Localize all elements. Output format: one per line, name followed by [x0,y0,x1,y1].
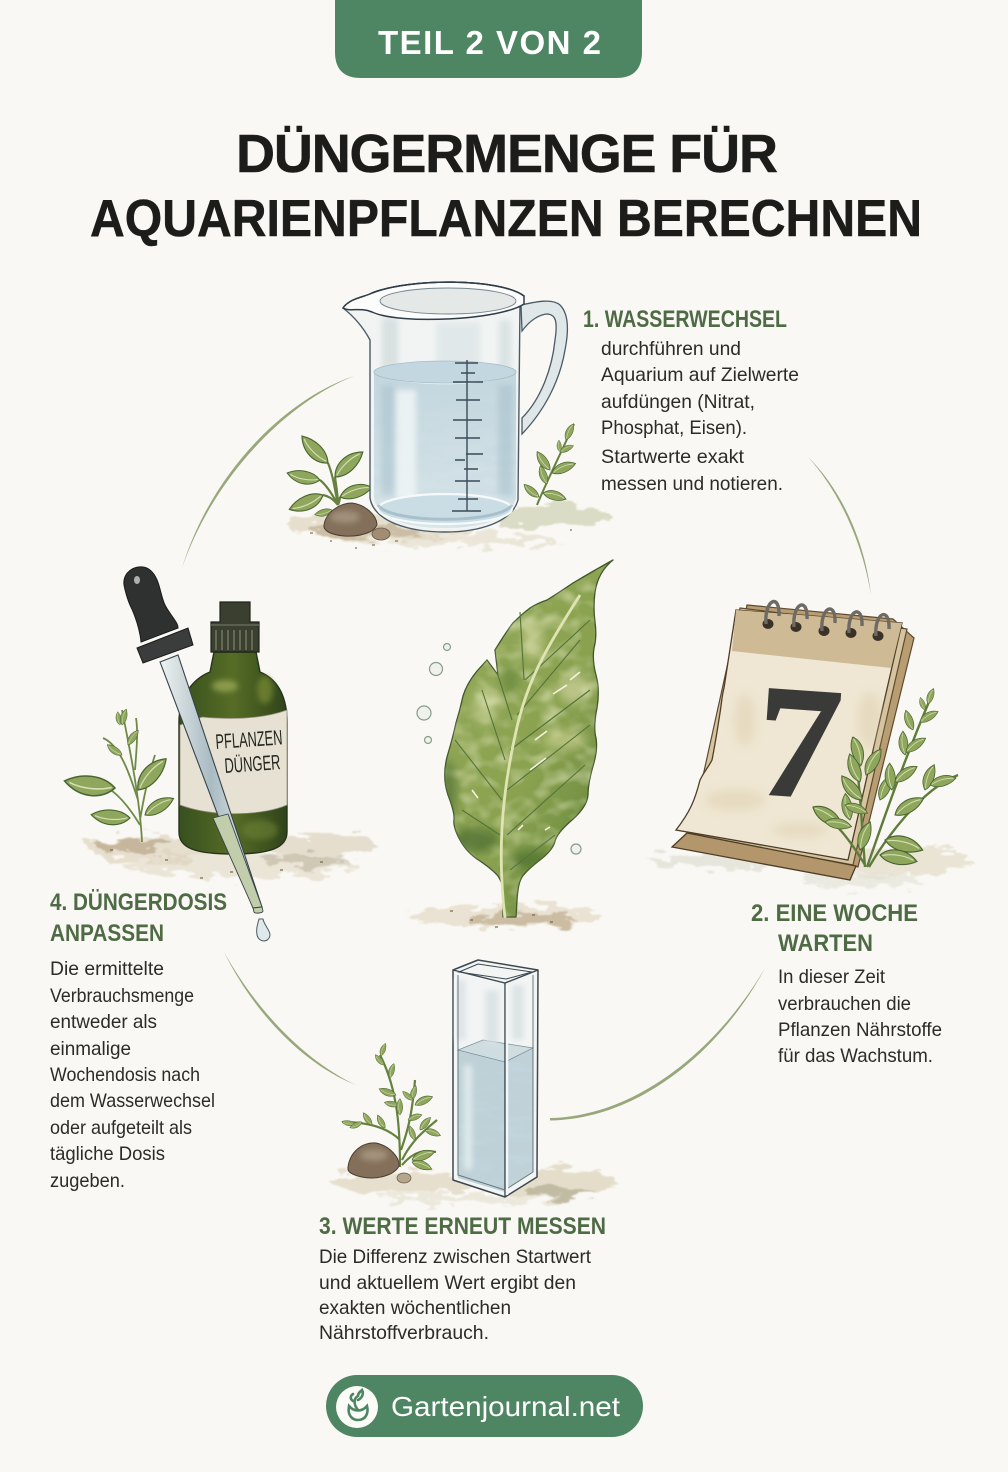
heading step 2: WARTEN [778,930,873,957]
leaf highlights [472,672,580,830]
base board [672,833,856,880]
body step 1: durchführen und [601,338,741,360]
body step 1: Phosphat, Eisen). [601,417,747,439]
soil under calendar [648,845,971,887]
leaf blade [445,560,613,917]
illustration: fertilizer bottle with dropper [63,567,375,941]
jug glass [343,282,524,532]
bottle body [179,652,287,854]
page header band [732,610,902,668]
leaf veins [455,612,590,870]
body step 2: für das Wachstum. [778,1045,933,1067]
plant right of jug [521,422,577,505]
title [90,124,922,248]
body step 4: oder aufgeteilt als [50,1117,192,1139]
body step 2: In dieser Zeit [778,966,886,988]
bottle cap [211,602,259,652]
jug rim [343,282,524,319]
heading step 2 [751,900,918,957]
dropper pipette [124,567,270,941]
water [370,370,520,530]
central leaf [407,550,620,930]
body step 1 [601,338,799,495]
body step 4 [50,958,215,1192]
heading step 4: 4. DÜNGERDOSIS [50,889,227,916]
arc arrows: cycle [182,376,871,1120]
body step 3: exakten wöchentlichen [319,1297,511,1319]
binder rings [762,602,889,641]
cuvette water [455,1040,537,1195]
rock and pebble [324,503,390,540]
soil patch under jug [288,505,611,548]
body step 1: Aquarium auf Zielwerte [601,364,799,386]
heading step 4 [50,889,227,947]
body step 3: Nährstoffverbrauch. [319,1322,489,1344]
body step 4: tägliche Dosis [50,1143,165,1165]
heading step 2: 2. EINE WOCHE [751,900,918,927]
body step 3: und aktuellem Wert ergibt den [319,1272,576,1294]
glass shading [382,318,511,370]
soil under leaf [407,905,603,927]
text: step 2 [751,900,942,1067]
label: DÜNGER [224,751,281,778]
small plant [63,708,176,842]
logo icon [336,1386,378,1428]
body step 4: einmalige [50,1038,131,1060]
footer brand pill [326,1375,643,1437]
text: step 4 [50,889,227,1192]
heading step 4: ANPASSEN [50,920,164,947]
illustration: measuring jug [286,282,611,548]
page washes [705,692,882,837]
plant beside calendar [810,687,958,868]
body step 1: Startwerte exakt [601,446,745,468]
soil under bottle [88,833,375,878]
plant left of jug [286,432,374,518]
body step 4: Verbrauchsmenge [50,985,194,1007]
body step 2 [778,966,942,1067]
back sheets [700,605,914,867]
midrib [501,595,580,918]
body step 1: aufdüngen (Nitrat, [601,391,755,413]
body step 4: Die ermittelte [50,958,164,980]
illustration: test cuvette [330,960,617,1203]
cuvette glass [453,960,538,1197]
text: step 3 [319,1213,606,1344]
illustration: calendar with number 7 [648,602,971,887]
body step 4: dem Wasserwechsel [50,1090,215,1112]
body step 2: verbrauchen die [778,993,911,1015]
plant [341,1042,442,1172]
tab: part label [335,0,642,78]
jug handle [521,301,567,434]
number seven: 7 [751,652,847,834]
measuring scale [452,360,483,511]
body step 1: messen und notieren. [601,473,783,495]
heading step 1: 1. WASSERWECHSEL [583,306,787,333]
tab: part label: TEIL 2 VON 2 [378,24,601,61]
leaf mottling [444,560,613,917]
body step 4: entweder als [50,1011,157,1033]
title: DÜNGERMENGE FÜR [236,124,778,184]
body step 3 [319,1246,592,1344]
cuvette edges [453,964,538,1197]
body step 2: Pflanzen Nährstoffe [778,1019,942,1041]
body step 3: Die Differenz zwischen Startwert [319,1246,592,1268]
heading step 3: 3. WERTE ERNEUT MESSEN [319,1213,606,1240]
front page [676,610,902,860]
rock and pebble [348,1143,411,1183]
text: step 1 [583,306,799,495]
footer brand pill: Gartenjournal.net [391,1391,620,1422]
label: PFLANZEN [215,726,283,754]
soil under cuvette [330,1167,617,1203]
label [180,710,287,814]
title: AQUARIENPFLANZEN BERECHNEN [90,190,922,248]
body step 4: zugeben. [50,1170,125,1192]
body step 4: Wochendosis nach [50,1064,200,1086]
bubbles [417,644,581,854]
